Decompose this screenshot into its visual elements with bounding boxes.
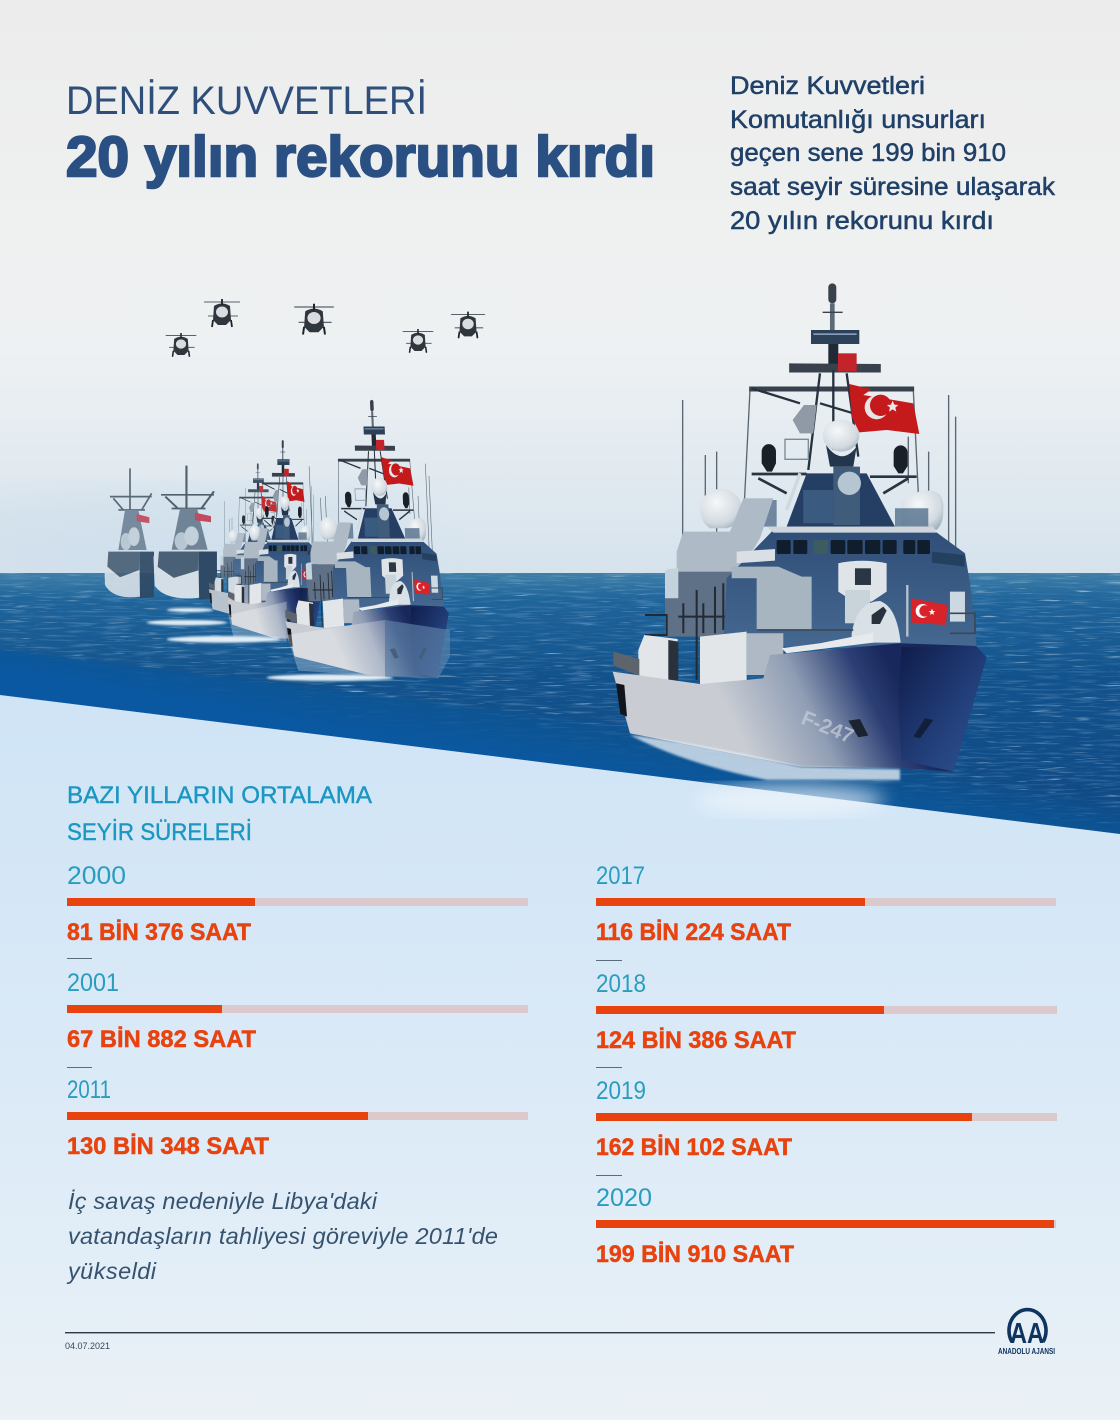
title line 2: 20 yılın rekorunu kırdı <box>66 125 655 189</box>
bar 2017: 116 BİN 224 SAAT <box>596 919 791 946</box>
bar 2000: 81 BİN 376 SAAT <box>67 919 251 946</box>
chart heading: SEYİR SÜRELERİ <box>67 819 252 846</box>
intro text: 20 yılın rekorunu kırdı <box>730 207 994 235</box>
sea <box>0 573 1120 838</box>
hull number: F-247 <box>798 707 857 748</box>
far ship 2 <box>153 466 217 600</box>
helicopter 5 <box>451 312 485 338</box>
bar 2001: 2001 <box>67 969 119 997</box>
bar 2017 <box>596 862 1056 946</box>
bow wave <box>630 735 900 780</box>
lower panel <box>0 695 1120 1420</box>
helicopter 2 <box>204 299 240 327</box>
date: 04.07.2021 <box>65 1341 110 1351</box>
front small ship F-244 <box>276 400 452 678</box>
bar 2018 <box>596 970 1057 1054</box>
bar 2001: 67 BİN 882 SAAT <box>67 1026 256 1053</box>
bar chart: left column <box>67 862 528 1160</box>
note about 2011: İç savaş nedeniyle Libya'daki <box>68 1188 378 1214</box>
bar chart: right column <box>596 862 1057 1268</box>
bar 2020 <box>596 1184 1056 1268</box>
Anadolu Ajansi logo: ANADOLU AJANSI <box>998 1347 1055 1356</box>
chart heading <box>67 782 372 846</box>
bar 2000 <box>67 862 528 946</box>
note about 2011: vatandaşların tahliyesi göreviyle 2011'de <box>68 1223 498 1249</box>
front ship hull shading <box>287 620 385 677</box>
intro text: geçen sene 199 bin 910 <box>730 139 1006 167</box>
bar 2019: 162 BİN 102 SAAT <box>596 1134 792 1161</box>
footer rule <box>65 1332 995 1333</box>
note about 2011 <box>66 1188 498 1284</box>
bar 2019 <box>596 1077 1057 1161</box>
ship column in the distance <box>104 400 452 681</box>
intro text <box>730 72 1056 235</box>
main ship F-247 <box>613 283 987 780</box>
bar 2019: 2019 <box>596 1077 646 1105</box>
note about 2011: yükseldi <box>66 1258 157 1284</box>
bar 2011: 2011 <box>67 1076 111 1104</box>
bar 2018: 124 BİN 386 SAAT <box>596 1027 796 1054</box>
bar 2020: 2020 <box>596 1184 652 1212</box>
ship 3 <box>228 440 321 640</box>
foam ship column <box>147 608 393 681</box>
bar 2011: 130 BİN 348 SAAT <box>67 1133 269 1160</box>
horizon haze <box>0 490 420 590</box>
helicopter 1 <box>166 333 196 357</box>
bar 2018: 2018 <box>596 970 646 998</box>
diagonal blue band <box>0 650 1120 838</box>
Anadolu Ajansi logo: AA <box>1010 1318 1044 1350</box>
bar 2020: 199 BİN 910 SAAT <box>596 1241 794 1268</box>
bar 2000: 2000 <box>67 862 126 890</box>
Anadolu Ajansi logo <box>998 1310 1055 1356</box>
helicopter 3 <box>294 304 334 334</box>
title line 1: DENİZ KUVVETLERİ <box>66 78 427 123</box>
ship 4 <box>209 463 292 622</box>
helicopter 4 <box>403 329 433 353</box>
chart heading: BAZI YILLARIN ORTALAMA <box>67 782 372 809</box>
bar 2011 <box>67 1076 528 1160</box>
intro text: Deniz Kuvvetleri <box>730 72 925 100</box>
bar 2001 <box>67 969 528 1053</box>
far ship 1 <box>104 468 154 598</box>
sky background <box>0 0 1120 600</box>
ship 3 hull lightening <box>228 602 287 642</box>
helicopter formation <box>166 299 485 357</box>
wake mist <box>695 784 885 816</box>
intro text: saat seyir süresine ulaşarak <box>730 173 1056 201</box>
bar 2017: 2017 <box>596 862 645 890</box>
intro text: Komutanlığı unsurları <box>730 106 986 134</box>
title <box>66 78 655 189</box>
